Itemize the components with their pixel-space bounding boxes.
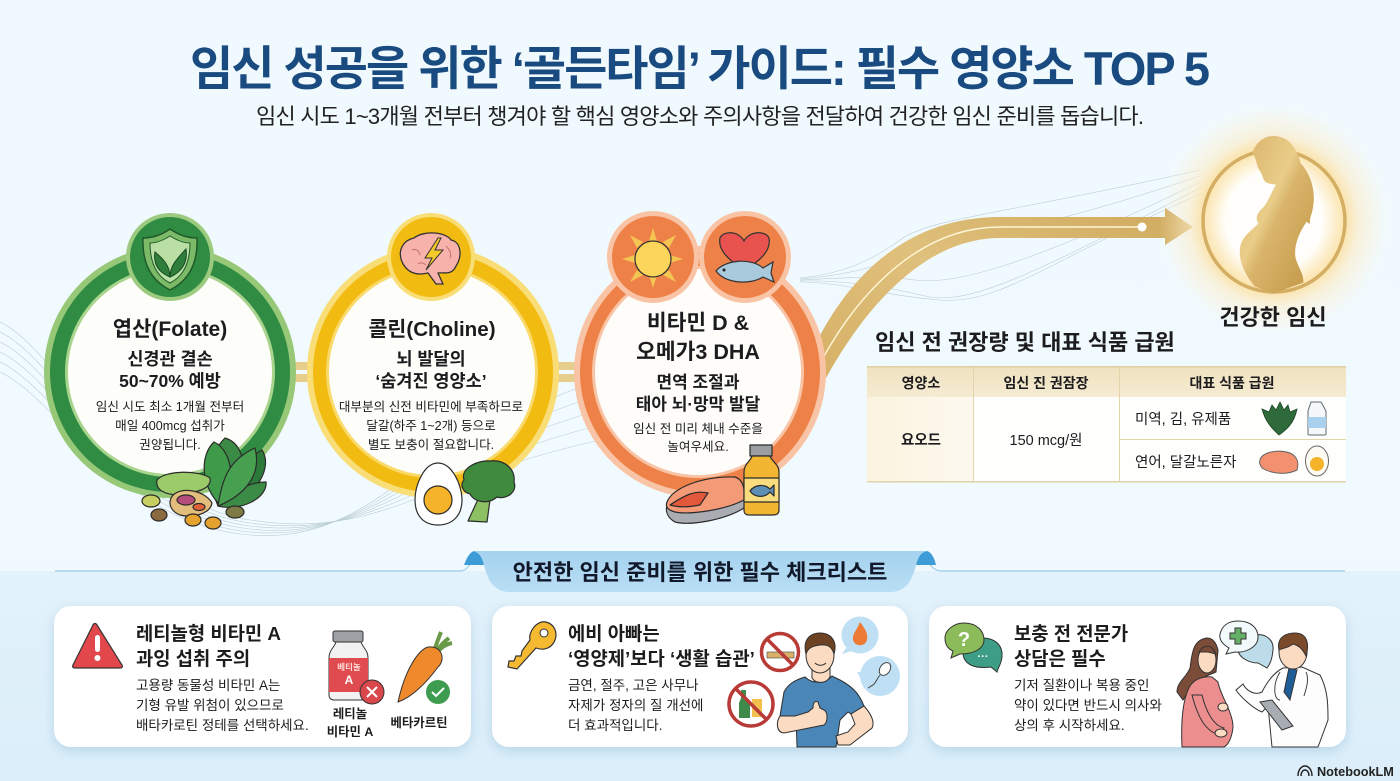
title: 임신 성공을 위한 ‘골든타임’ 가이드: 필수 영양소 TOP 5 (190, 42, 1210, 95)
table header: 영양소 (902, 375, 940, 391)
subheading: choline (375, 349, 487, 391)
checklist heading ribbon: 안전한 임신 준비를 위한 필수 체크리스트 (513, 560, 887, 585)
subtitle: 임신 시도 1~3개월 전부터 챙겨야 할 핵심 영양소와 주의사항을 전달하여 건강한 임신 준비를 돕습니다. (256, 104, 1144, 129)
text block: folate: 권양됩니다. (139, 438, 201, 452)
connector: folate to choline (295, 362, 311, 382)
icon: no alcohol (729, 682, 773, 726)
icon: medical speech bubbles (1220, 621, 1273, 668)
text block: 기저 질환이나 복용 중인 (1014, 678, 1149, 693)
icon: retinol bottle: A (345, 673, 354, 687)
table header: 임신 진 권잠장 (1003, 375, 1089, 391)
icon: seaweed (1262, 402, 1297, 435)
panel: vitamin D and omega-3 circle (574, 211, 826, 498)
heading (568, 623, 755, 669)
panel: consult specialist card (929, 606, 1346, 747)
text block: 자제가 정자의 질 개선에 (568, 698, 703, 713)
text block: 상의 후 시작하세요. (1014, 718, 1125, 733)
heading: 에비 아빠는 (568, 623, 660, 644)
gold ring (1203, 150, 1345, 292)
panel: folate circle (44, 213, 296, 498)
icon: milk carton (1308, 402, 1326, 435)
icon: brain with lightning (387, 213, 475, 301)
panel: choline circle (307, 213, 559, 498)
arrow to healthy pregnancy (815, 208, 1193, 378)
subheading: choline: 뇌 발달의 (396, 349, 466, 369)
icon: retinol bottle (329, 631, 384, 704)
connector: choline to vitamin D (556, 362, 576, 382)
subheading: choline: ‘숨겨진 영양소’ (375, 371, 487, 391)
label: 건강한 임신 (1219, 305, 1327, 330)
panel: future father card (492, 606, 908, 747)
heading: 레티놀형 비타민 A (136, 623, 281, 644)
icon: metabolism bubble (842, 616, 878, 654)
text block: choline (339, 400, 523, 452)
icon: carrot (398, 632, 452, 704)
text block (568, 678, 703, 733)
text block: 고용량 동물성 비타민 A는 (136, 678, 280, 693)
healthy pregnancy goal (1159, 105, 1389, 335)
icon: key (508, 622, 556, 669)
heading: 상담은 필수 (1014, 648, 1106, 669)
text block: vitamin D and DHA: 놀여우세요. (667, 440, 729, 454)
text block: vitamin D and DHA (633, 422, 763, 454)
background flow lines (0, 170, 1200, 536)
icon: sperm bubble (857, 656, 900, 696)
icon: egg and broccoli (415, 461, 515, 525)
heading: vitamin D and DHA: 오메가3 DHA (636, 340, 760, 364)
text block: folate (96, 400, 244, 452)
heading: folate: 엽산(Folate) (113, 318, 227, 341)
text block: folate: 매일 400mcg 섭취가 (115, 419, 225, 433)
text block: 금연, 절주, 고은 사무나 (568, 678, 699, 693)
heading (1014, 623, 1128, 669)
table header: 대표 식품 급원 (1189, 375, 1275, 391)
icon: salmon and supplement bottle (666, 445, 779, 523)
table header (902, 375, 1275, 391)
table row: 요오드 (901, 433, 941, 449)
icon: no smoking (762, 634, 798, 670)
heading: choline: 콜린(Choline) (368, 318, 496, 341)
heading: ‘영양제’보다 ‘생활 습관’ (568, 648, 755, 669)
icon: spinach and beans (142, 438, 266, 529)
icon: chat bubbles (945, 623, 1002, 672)
text block: choline: 달갈(하주 1~2개) 등으로 (366, 419, 496, 433)
subheading: folate (119, 349, 221, 391)
text block: 배타카로틴 정테를 선택하세요. (136, 718, 309, 733)
checklist heading ribbon (464, 551, 936, 592)
heading: 보충 전 전문가 (1014, 623, 1128, 644)
icon: chat bubbles: ··· (978, 651, 988, 663)
text block: 약이 있다면 반드시 의사와 (1014, 698, 1162, 713)
checklist band (0, 565, 1400, 781)
icon: retinol bottle: 베티놀 (337, 662, 361, 672)
text block: 더 효과적입니다. (568, 718, 662, 733)
table row: 150 mcg/원 (1010, 432, 1082, 449)
icon: shield with leaf (126, 213, 214, 301)
icon: doctor (1236, 633, 1328, 747)
table row (901, 411, 1236, 471)
table row: 연어, 달갈노른자 (1135, 454, 1236, 471)
subheading: folate: 50~70% 예방 (119, 371, 221, 391)
icon: boiled egg (1306, 446, 1328, 476)
table heading: 임신 전 권장량 및 대표 식품 급원 (875, 330, 1175, 355)
glow (1159, 105, 1389, 335)
heading (136, 623, 281, 669)
label: retinol vitamin A (327, 706, 373, 739)
icon: chat bubbles: ? (958, 629, 970, 651)
panel: vitamin A caution card (54, 606, 471, 747)
heading: vitamin D and DHA (636, 311, 760, 364)
icon: pregnant woman (1177, 638, 1233, 747)
table row: 미역, 김, 유제품 (1135, 411, 1231, 428)
icon: father figure (777, 633, 873, 747)
icon: sun (607, 211, 699, 303)
icon: salmon steak (1260, 451, 1298, 473)
subheading: vitamin D and DHA: 면역 조절과 (657, 373, 740, 392)
icon: warning triangle (73, 624, 122, 668)
text block: vitamin D and DHA: 임신 전 미리 체내 수준을 (633, 422, 763, 436)
table: iodine (867, 366, 1346, 483)
heading: 과잉 섭취 주의 (136, 648, 250, 669)
text block: choline: 대부분의 신전 비타민에 부족하므로 (339, 400, 523, 414)
text block (1014, 678, 1162, 733)
text block: folate: 임신 시도 최소 1개월 전부터 (96, 400, 244, 414)
label: retinol vitamin A: 비타민 A (327, 725, 373, 739)
subheading: vitamin D and DHA (636, 373, 761, 414)
text block: 기형 유발 위첨이 있으므로 (136, 698, 284, 713)
label: retinol vitamin A: 레티놀 (333, 706, 367, 721)
label: beta carotene: 베타카르틴 (390, 715, 448, 730)
text block: choline: 별도 보충이 절요합니다. (368, 438, 494, 452)
subheading: vitamin D and DHA: 태아 뇌·망막 발달 (636, 395, 761, 414)
icon: pregnant silhouette (1240, 136, 1314, 293)
icon: heart and fish (699, 211, 791, 303)
subheading: folate: 신경관 결손 (127, 349, 213, 369)
heading: vitamin D and DHA: 비타민 D & (647, 311, 749, 335)
logo: NotebookLM: NotebookLM (1317, 765, 1394, 779)
text block (136, 678, 309, 733)
